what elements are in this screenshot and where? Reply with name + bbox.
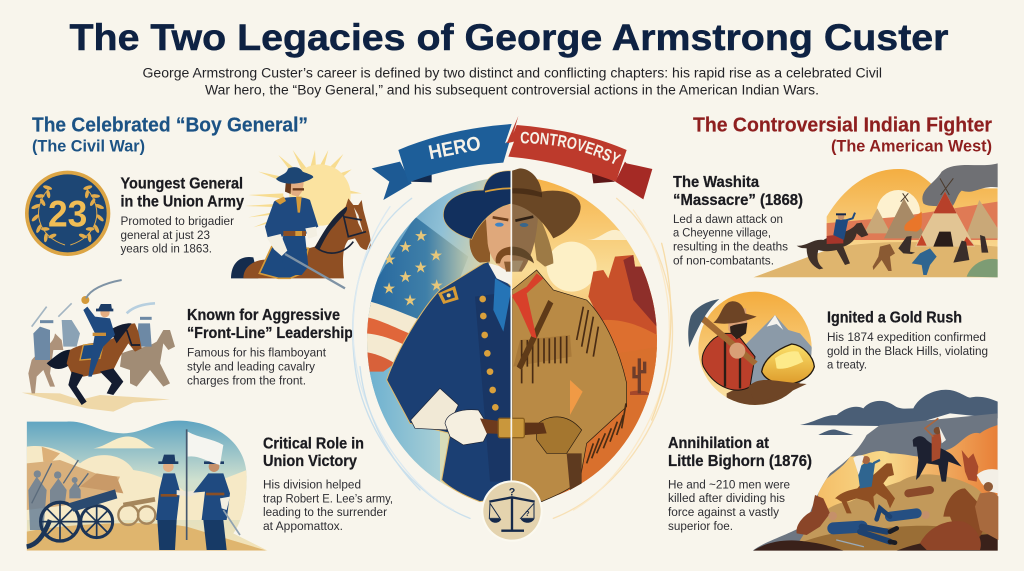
panel: portrait [367,116,657,540]
portrait background: flag and desert: ★ [414,260,428,277]
portrait background: flag and desert: ★ [382,251,396,268]
portrait background: flag and desert: ★ [382,281,396,298]
icon: scales: ? [525,509,530,518]
ribbon: hero [372,124,512,200]
text: washita: The Washita [673,174,759,191]
text: youngest general: general at just 23 [120,228,210,242]
portrait background: flag and desert: ★ [398,269,412,286]
icon: scales [481,480,543,542]
text: critical role: trap Robert E. Lee’s army, [263,491,393,505]
text: washita [673,174,803,267]
illustration: general on horseback with sunburst [231,150,371,288]
intro text [142,65,882,97]
heading: indian fighter [693,114,992,156]
buckle [498,418,524,438]
wisps around portrait [353,198,672,518]
text: critical role: His division helped [263,478,361,492]
text: critical role: leading to the surrender [263,505,387,519]
portrait background: flag and desert: ★ [403,292,417,309]
portrait background: flag and desert [367,179,657,496]
text: front-line leadership: style and leading cavalry [187,360,316,374]
figure: controversy half [512,270,627,502]
text: little bighorn: superior foe. [668,519,733,533]
text: washita: a Cheyenne village, [673,226,771,240]
heading: indian fighter: The Controversial Indian Fighter [693,114,992,137]
centre divider [509,169,514,483]
ribbon: controversy: CONTROVERSY [520,132,622,164]
figure: hero half [387,262,511,502]
panel: civil war [22,114,393,553]
text: washita: “Massacre” (1868) [673,192,803,209]
heading: boy general: The Celebrated “Boy General” [32,114,308,137]
illustration: appomattox surrender [27,420,270,553]
portrait background: flag and desert: ★ [414,228,428,245]
text: youngest general [120,176,244,256]
ribbon: hero: HERO [427,133,483,164]
text: little bighorn: force against a vastly [668,505,780,519]
portrait background: flag and desert: ★ [429,247,443,264]
illustration: cavalry charge [22,280,175,412]
face: hero side [470,204,511,272]
text: little bighorn [668,435,812,533]
icon: 23 laurel badge [25,171,110,256]
text: youngest general: years old in 1863. [120,242,212,256]
text: critical role [263,435,393,533]
text: front-line leadership: charges from the front. [187,373,306,387]
text: washita: of non-combatants. [673,253,774,267]
text: little bighorn: Little Bighorn (1876) [668,453,812,470]
text: little bighorn: Annihilation at [668,435,769,452]
hats [443,168,581,239]
intro text: George Armstrong Custer’s career is defined by two distinct and conflicting chapters: his rapid rise as a celebrated Civil [142,65,882,80]
text: youngest general: Promoted to brigadier [120,214,234,228]
illustration: washita village [753,163,1000,280]
portrait background: flag and desert: ★ [430,277,444,294]
illustration: little bighorn battle [753,390,999,553]
text: gold rush: a treaty. [827,358,867,372]
ribbon: controversy [506,116,652,200]
panel: american west [668,114,1000,553]
text: washita: resulting in the deaths [673,240,788,254]
text: front-line leadership: Famous for his flamboyant [187,346,327,360]
text: little bighorn: He and ~210 men were [668,478,790,492]
text: washita: Led a dawn attack on [673,212,783,226]
heading: boy general: (The Civil War) [32,137,145,156]
icon: 23 laurel badge: 23 [48,193,87,235]
text: critical role: at Appomattox. [263,519,343,533]
text: critical role: Union Victory [263,453,357,470]
text: front-line leadership [187,307,353,387]
heading: boy general [32,114,308,156]
intro text: War hero, the “Boy General,” and his subsequent controversial actions in the American Indian Wars. [205,82,819,97]
title: The Two Legacies of George Armstrong Custer [70,17,948,58]
text: front-line leadership: “Front-Line” Leadership [187,325,353,342]
text: critical role: Critical Role in [263,435,364,452]
heading: indian fighter: (The American West) [831,137,992,156]
text: gold rush: His 1874 expedition confirmed [827,330,986,344]
text: youngest general: in the Union Army [120,194,244,211]
text: front-line leadership: Known for Aggressive [187,307,340,324]
text: gold rush: gold in the Black Hills, violating [827,344,988,358]
icon: scales: ? [509,486,515,498]
face: controversy side [512,204,553,272]
text: little bighorn: killed after dividing his [668,491,785,505]
text: gold rush [827,310,988,372]
text: youngest general: Youngest General [120,176,243,193]
portrait background: flag and desert: ★ [398,239,412,256]
text: gold rush: Ignited a Gold Rush [827,310,962,327]
illustration: gold rush miner [688,290,820,407]
